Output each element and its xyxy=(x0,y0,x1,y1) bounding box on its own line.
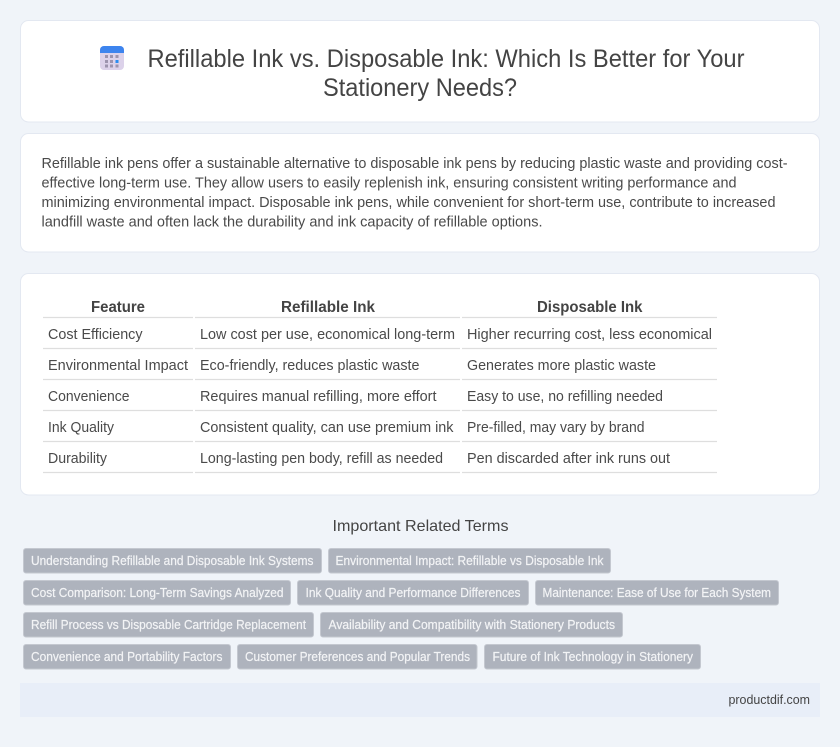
footer xyxy=(20,683,820,717)
chip: Understanding Refillable and Disposable Ink Systems xyxy=(31,554,314,568)
chip xyxy=(24,580,290,605)
chip xyxy=(484,644,700,669)
table row: ink quality: Ink Quality xyxy=(48,420,115,436)
chip: Customer Preferences and Popular Trends xyxy=(245,650,470,664)
table row: convenience xyxy=(48,389,663,405)
chip xyxy=(24,612,314,637)
chip: Refill Process vs Disposable Cartridge Replacement xyxy=(31,618,306,632)
table row: convenience: Convenience xyxy=(48,389,130,405)
table row: environmental impact: Environmental Impact xyxy=(48,358,188,374)
chip: Environmental Impact: Refillable vs Disposable Ink xyxy=(336,554,604,568)
footer source text: productdif.com xyxy=(728,693,810,707)
title xyxy=(148,45,744,102)
table row: cost efficiency xyxy=(48,327,712,343)
heading: important related terms: Important Related Terms xyxy=(332,518,508,535)
table header xyxy=(91,299,643,316)
table row: durability: Durability xyxy=(48,451,108,467)
chip xyxy=(298,580,528,605)
title: Refillable Ink vs. Disposable Ink: Which Is Better for Your xyxy=(148,45,744,73)
text: description paragraph: landfill waste and often lack the durability and ink capacity of refillable options. xyxy=(42,214,542,230)
chip xyxy=(320,612,622,637)
table header: Feature xyxy=(91,299,145,316)
chip xyxy=(536,580,778,605)
table row: cost efficiency: Cost Efficiency xyxy=(48,327,143,343)
chip xyxy=(24,548,322,573)
table row: environmental impact: Generates more plastic waste xyxy=(467,358,656,374)
chip: Availability and Compatibility with Stationery Products xyxy=(328,618,615,632)
chip xyxy=(238,644,477,669)
chip: Cost Comparison: Long-Term Savings Analyzed xyxy=(31,586,284,600)
table header: Refillable Ink xyxy=(281,299,375,316)
panel: description xyxy=(20,134,820,252)
table header: Disposable Ink xyxy=(537,299,643,316)
text: description paragraph: Refillable ink pens offer a sustainable alternative to disposable ink pens by reducing plastic waste and providing cost- xyxy=(42,155,788,172)
chip: Ink Quality and Performance Differences xyxy=(306,586,520,600)
chip xyxy=(24,644,230,669)
table row: durability: Long-lasting pen body, refill as needed xyxy=(200,451,443,467)
table row: ink quality xyxy=(48,420,644,436)
table row: durability: Pen discarded after ink runs out xyxy=(467,451,670,467)
table row: convenience: Requires manual refilling, more effort xyxy=(200,389,436,405)
chip: Future of Ink Technology in Stationery xyxy=(492,650,694,664)
title: Stationery Needs? xyxy=(323,74,517,102)
table row: convenience: Easy to use, no refilling needed xyxy=(467,389,663,405)
panel: header xyxy=(20,20,820,122)
chip: Maintenance: Ease of Use for Each System xyxy=(542,586,771,600)
icon: calendar xyxy=(100,46,124,70)
table row: ink quality: Pre-filled, may vary by brand xyxy=(467,420,644,436)
table row: ink quality: Consistent quality, can use premium ink xyxy=(200,420,454,436)
text: description paragraph: minimizing environmental impact. Disposable ink pens, while convenient for short-term use, contribute to increased xyxy=(42,194,776,211)
chip xyxy=(328,548,610,573)
related term chips xyxy=(24,548,778,669)
table row: cost efficiency: Higher recurring cost, less economical xyxy=(467,327,712,343)
panel: comparison table xyxy=(20,274,820,495)
table row: cost efficiency: Low cost per use, economical long-term xyxy=(200,327,455,343)
text: description paragraph: effective long-term use. They allow users to easily replenish ink, ensuring consistent writing performance and xyxy=(42,174,736,192)
table row: durability xyxy=(48,451,670,467)
table row: environmental impact: Eco-friendly, reduces plastic waste xyxy=(200,358,420,374)
text: description paragraph xyxy=(42,155,788,230)
chip: Convenience and Portability Factors xyxy=(31,650,222,664)
table row: environmental impact xyxy=(48,358,656,374)
